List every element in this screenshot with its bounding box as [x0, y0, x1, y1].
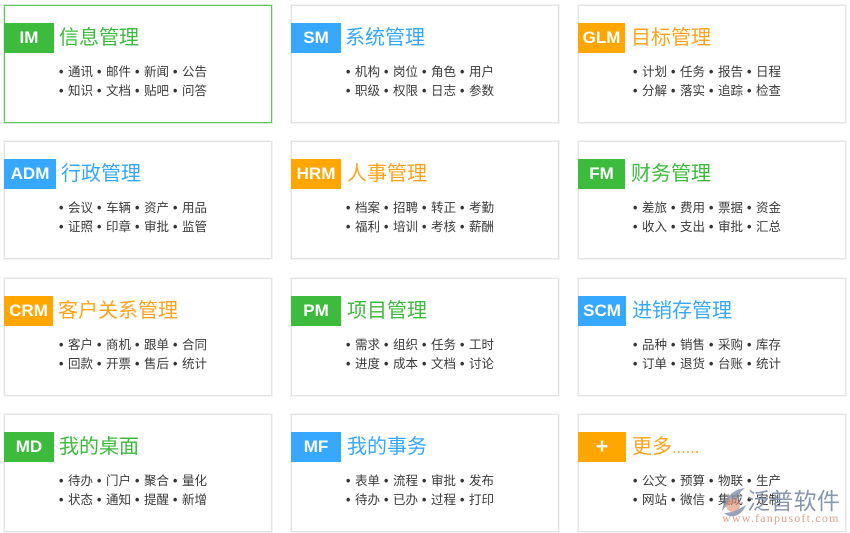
text: MD line 2: 新增	[182, 493, 207, 507]
text: CRM line 2: 售后	[144, 357, 169, 371]
text: FM line 2: 支出	[680, 220, 705, 234]
text: SCM line 1: 品种	[642, 338, 667, 352]
text: SM line 1: 机构	[355, 65, 380, 79]
badge: CRM	[4, 296, 53, 326]
text: GLM line 2: •	[709, 84, 713, 98]
badge: IM	[4, 23, 54, 53]
text: HRM line 2: •	[384, 220, 388, 234]
text: MD line 2	[59, 493, 207, 507]
text: MF line 2: 已办	[393, 493, 418, 507]
text: HRM line 2: 薪酬	[469, 220, 494, 234]
text: MF line 2: 过程	[431, 493, 456, 507]
panel: GLM	[578, 5, 846, 123]
text: CRM line 1: •	[135, 338, 139, 352]
text: SM line 1: 用户	[469, 65, 494, 79]
text: MF line 2: •	[346, 493, 350, 507]
text: MD line 2: •	[97, 493, 101, 507]
text: SM line 2: •	[346, 84, 350, 98]
text: more line 1: •	[671, 474, 675, 488]
icon: watermark logo	[722, 488, 746, 516]
heading: SCM: 进销存管理	[632, 300, 732, 322]
text: ADM line 1: •	[59, 201, 63, 215]
text: more line 2: 微信	[680, 493, 705, 507]
text: CRM line 1: 跟单	[144, 338, 169, 352]
text: watermark name: 泛普软件	[747, 488, 840, 514]
text: SCM line 1: 库存	[756, 338, 781, 352]
text: IM line 2: •	[59, 84, 63, 98]
text: HRM line 2: 培训	[393, 220, 418, 234]
text: FM line 2: 收入	[642, 220, 667, 234]
text: ADM line 2: •	[59, 220, 63, 234]
text: SCM line 2: 台账	[718, 357, 743, 371]
text: GLM line 1: •	[709, 65, 713, 79]
text: more line 1: 预算	[680, 474, 705, 488]
badge: plus: +	[596, 435, 608, 458]
heading: more: 更多......	[632, 436, 699, 458]
panel: SCM	[578, 278, 846, 396]
text: SM line 1: 角色	[431, 65, 456, 79]
text: CRM line 2: •	[97, 357, 101, 371]
badge: GLM: GLM	[583, 28, 620, 47]
text: more line 2	[633, 493, 781, 507]
text: PM line 1: 工时	[469, 338, 494, 352]
text: MF line 1: •	[384, 474, 388, 488]
text: GLM line 1: 报告	[718, 65, 743, 79]
heading: ADM: 行政管理	[61, 163, 141, 185]
badge: ADM	[4, 159, 56, 189]
text: IM line 2: 贴吧	[144, 84, 169, 98]
text: more line 1: 公文	[642, 474, 667, 488]
badge: SM: SM	[303, 28, 329, 47]
text: MF line 2	[346, 493, 494, 507]
text: MF line 1: •	[422, 474, 426, 488]
panel: more	[578, 414, 846, 532]
text: FM line 2: •	[747, 220, 751, 234]
text: MF line 2: 待办	[355, 493, 380, 507]
text: MF line 1	[346, 474, 494, 488]
text: MD line 1: 待办	[68, 474, 93, 488]
text: SM line 2: 职级	[355, 84, 380, 98]
text: CRM line 2: •	[59, 357, 63, 371]
text: SM line 1: •	[384, 65, 388, 79]
badge: HRM: HRM	[297, 164, 335, 183]
text: GLM line 1: 日程	[756, 65, 781, 79]
text: SM line 2: 日志	[431, 84, 456, 98]
text: IM line 2: 问答	[182, 84, 207, 98]
badge: SCM: SCM	[583, 301, 621, 320]
text: ADM line 2	[59, 220, 207, 234]
panel: MD	[4, 414, 272, 532]
text: CRM line 1: •	[97, 338, 101, 352]
badge: MF	[291, 432, 341, 462]
text: ADM line 1: 车辆	[106, 201, 131, 215]
text: GLM line 2: 落实	[680, 84, 705, 98]
text: IM line 1	[59, 65, 207, 79]
text: CRM line 1: 合同	[182, 338, 207, 352]
text: CRM line 1	[59, 338, 207, 352]
text: HRM line 1: 档案	[355, 201, 380, 215]
text: more line 2: 集成	[718, 493, 743, 507]
badge: MD	[4, 432, 54, 462]
text: SM line 1	[346, 65, 494, 79]
text: PM line 2: 文档	[431, 357, 456, 371]
text: more line 1: •	[709, 474, 713, 488]
text: SCM line 2	[633, 357, 781, 371]
text: more line 2: 定制	[756, 493, 781, 507]
badge: IM: IM	[20, 28, 38, 47]
text: SCM line 2: 订单	[642, 357, 667, 371]
text: MD line 2: 提醒	[144, 493, 169, 507]
text: more line 1: •	[633, 474, 637, 488]
text: FM line 2: •	[633, 220, 637, 234]
text: FM line 1: 资金	[756, 201, 781, 215]
text: MD line 1: 聚合	[144, 474, 169, 488]
badge: HRM	[291, 159, 341, 189]
text: watermark url: www.fanpusoft.com	[722, 511, 840, 525]
text: CRM line 1: •	[173, 338, 177, 352]
badge: SCM	[578, 296, 626, 326]
text: IM line 2: •	[173, 84, 177, 98]
text: GLM line 1	[633, 65, 781, 79]
text: PM line 1: 组织	[393, 338, 418, 352]
text: MD line 1: •	[173, 474, 177, 488]
text: CRM line 2: •	[135, 357, 139, 371]
heading: IM: 信息管理	[59, 27, 139, 49]
text: GLM line 2: 追踪	[718, 84, 743, 98]
text: CRM line 1: 客户	[68, 338, 93, 352]
text: SCM line 2: 统计	[756, 357, 781, 371]
text: MF line 1: 表单	[355, 474, 380, 488]
text: PM line 2: 成本	[393, 357, 418, 371]
text: HRM line 1: 招聘	[393, 201, 418, 215]
text: ADM line 1: 用品	[182, 201, 207, 215]
text: HRM line 1: •	[422, 201, 426, 215]
text: ADM line 1: •	[97, 201, 101, 215]
text: FM line 1: 费用	[680, 201, 705, 215]
text: IM line 1: 邮件	[106, 65, 131, 79]
text: MF line 1: •	[460, 474, 464, 488]
text: SM line 2: •	[460, 84, 464, 98]
text: IM line 1: •	[59, 65, 63, 79]
text: HRM line 1: 转正	[431, 201, 456, 215]
panel: SM	[291, 5, 559, 123]
text: SCM line 1: 采购	[718, 338, 743, 352]
text: GLM line 2: •	[747, 84, 751, 98]
text: PM line 1: 任务	[431, 338, 456, 352]
text: MF line 1: •	[346, 474, 350, 488]
heading: GLM: 目标管理	[631, 27, 711, 49]
text: more line 2: •	[747, 493, 751, 507]
text: GLM line 1: •	[747, 65, 751, 79]
text: HRM line 1: •	[346, 201, 350, 215]
badge: FM	[578, 159, 625, 189]
text: FM line 1	[633, 201, 781, 215]
text: MF line 2: •	[460, 493, 464, 507]
badge: CRM: CRM	[9, 301, 48, 320]
text: MD line 1: 量化	[182, 474, 207, 488]
text: ADM line 2: 证照	[68, 220, 93, 234]
text: SCM line 1: 销售	[680, 338, 705, 352]
text: CRM line 2: 统计	[182, 357, 207, 371]
text: MF line 1: 审批	[431, 474, 456, 488]
text: ADM line 2: •	[173, 220, 177, 234]
badge: plus	[578, 432, 626, 462]
text: PM line 1: •	[422, 338, 426, 352]
text: GLM line 2	[633, 84, 781, 98]
text: IM line 1: 新闻	[144, 65, 169, 79]
text: MD line 2: 状态	[68, 493, 93, 507]
text: SM line 1: •	[346, 65, 350, 79]
text: PM line 2: •	[346, 357, 350, 371]
text: HRM line 2: 福利	[355, 220, 380, 234]
text: more line 2: •	[671, 493, 675, 507]
text: IM line 2	[59, 84, 207, 98]
text: GLM line 1: •	[671, 65, 675, 79]
text: FM line 1: 票据	[718, 201, 743, 215]
badge: PM: PM	[303, 301, 329, 320]
text: GLM line 1: 计划	[642, 65, 667, 79]
text: FM line 2: 汇总	[756, 220, 781, 234]
text: more line 1	[633, 474, 781, 488]
text: PM line 1: •	[346, 338, 350, 352]
text: IM line 1: •	[173, 65, 177, 79]
text: SM line 1: •	[422, 65, 426, 79]
text: MF line 2: 打印	[469, 493, 494, 507]
text: CRM line 1: 商机	[106, 338, 131, 352]
badge: MD: MD	[16, 437, 42, 456]
text: HRM line 1: •	[384, 201, 388, 215]
text: SM line 2: 参数	[469, 84, 494, 98]
text: SCM line 1	[633, 338, 781, 352]
text: HRM line 2: •	[346, 220, 350, 234]
text: IM line 1: •	[135, 65, 139, 79]
text: SCM line 1: •	[633, 338, 637, 352]
text: SM line 2: 权限	[393, 84, 418, 98]
panel: IM	[4, 5, 272, 123]
text: SCM line 2: 退货	[680, 357, 705, 371]
text: PM line 1	[346, 338, 494, 352]
panel: HRM	[291, 141, 559, 259]
text: CRM line 2: •	[173, 357, 177, 371]
text: FM line 2: •	[709, 220, 713, 234]
text: SM line 2	[346, 84, 494, 98]
text: PM line 2: •	[384, 357, 388, 371]
text: FM line 1: •	[709, 201, 713, 215]
text: SM line 2: •	[384, 84, 388, 98]
text: ADM line 2: •	[97, 220, 101, 234]
text: PM line 2: •	[460, 357, 464, 371]
text: GLM line 1: 任务	[680, 65, 705, 79]
text: ADM line 2: 审批	[144, 220, 169, 234]
text: ADM line 1	[59, 201, 207, 215]
badge: SM	[291, 23, 341, 53]
text: SCM line 2: •	[709, 357, 713, 371]
text: MF line 1: 发布	[469, 474, 494, 488]
text: FM line 2: 审批	[718, 220, 743, 234]
text: CRM line 2	[59, 357, 207, 371]
text: ADM line 1: •	[135, 201, 139, 215]
text: PM line 1: 需求	[355, 338, 380, 352]
text: MD line 2: •	[135, 493, 139, 507]
text: SCM line 1: •	[671, 338, 675, 352]
text: more line 1: 物联	[718, 474, 743, 488]
text: SCM line 2: •	[747, 357, 751, 371]
text: PM line 2: 讨论	[469, 357, 494, 371]
panel: MF	[291, 414, 559, 532]
badge: ADM: ADM	[11, 164, 49, 183]
heading: HRM: 人事管理	[347, 163, 427, 185]
panel: ADM	[4, 141, 272, 259]
text: SCM line 2: •	[671, 357, 675, 371]
heading: PM: 项目管理	[347, 300, 427, 322]
badge: GLM	[578, 23, 625, 53]
text: FM line 2: •	[671, 220, 675, 234]
text: ADM line 2: •	[135, 220, 139, 234]
panel: CRM	[4, 278, 272, 396]
heading: CRM: 客户关系管理	[58, 300, 178, 322]
text: CRM line 2: 回款	[68, 357, 93, 371]
heading: SM: 系统管理	[345, 27, 425, 49]
heading: MF: 我的事务	[347, 436, 427, 458]
text: SCM line 1: •	[709, 338, 713, 352]
text: FM line 1: 差旅	[642, 201, 667, 215]
text: MD line 2: •	[173, 493, 177, 507]
text: GLM line 2: 分解	[642, 84, 667, 98]
text: ADM line 2: 监管	[182, 220, 207, 234]
text: GLM line 2: 检查	[756, 84, 781, 98]
text: HRM line 1: •	[460, 201, 464, 215]
text: GLM line 2: •	[633, 84, 637, 98]
text: IM line 1: 通讯	[68, 65, 93, 79]
text: more line 1: 生产	[756, 474, 781, 488]
text: MD line 1: •	[59, 474, 63, 488]
text: MF line 2: •	[384, 493, 388, 507]
text: SM line 2: •	[422, 84, 426, 98]
text: SM line 1: •	[460, 65, 464, 79]
text: PM line 2	[346, 357, 494, 371]
text: FM line 2	[633, 220, 781, 234]
text: IM line 1: •	[97, 65, 101, 79]
text: more line 2: •	[633, 493, 637, 507]
text: IM line 2: •	[135, 84, 139, 98]
text: SM line 1: 岗位	[393, 65, 418, 79]
text: more line 2: •	[709, 493, 713, 507]
text: MD line 2: •	[59, 493, 63, 507]
text: CRM line 2: 开票	[106, 357, 131, 371]
text: SCM line 2: •	[633, 357, 637, 371]
text: MD line 1: •	[97, 474, 101, 488]
badge: FM: FM	[589, 164, 614, 183]
badge: PM	[291, 296, 341, 326]
text: IM line 2: •	[97, 84, 101, 98]
text: HRM line 1: 考勤	[469, 201, 494, 215]
text: MF line 1: 流程	[393, 474, 418, 488]
text: IM line 2: 文档	[106, 84, 131, 98]
text: MD line 2: 通知	[106, 493, 131, 507]
text: GLM line 1: •	[633, 65, 637, 79]
text: MD line 1: •	[135, 474, 139, 488]
text: more line 1: •	[747, 474, 751, 488]
text: PM line 2: 进度	[355, 357, 380, 371]
text: ADM line 1: •	[173, 201, 177, 215]
text: CRM line 1: •	[59, 338, 63, 352]
badge: MF: MF	[304, 437, 328, 456]
panel: FM	[578, 141, 846, 259]
text: FM line 1: •	[747, 201, 751, 215]
heading: FM: 财务管理	[631, 163, 711, 185]
text: HRM line 1	[346, 201, 494, 215]
text: SCM line 1: •	[747, 338, 751, 352]
text: PM line 2: •	[422, 357, 426, 371]
text: ADM line 1: 会议	[68, 201, 93, 215]
text: PM line 1: •	[384, 338, 388, 352]
text: GLM line 2: •	[671, 84, 675, 98]
text: HRM line 2: •	[460, 220, 464, 234]
heading: MD: 我的桌面	[59, 436, 139, 458]
text: ADM line 1: 资产	[144, 201, 169, 215]
text: IM line 2: 知识	[68, 84, 93, 98]
text: MF line 2: •	[422, 493, 426, 507]
text: IM line 1: 公告	[182, 65, 207, 79]
text: MD line 1	[59, 474, 207, 488]
panel: PM	[291, 278, 559, 396]
text: FM line 1: •	[633, 201, 637, 215]
text: more line 2: 网站	[642, 493, 667, 507]
text: PM line 1: •	[460, 338, 464, 352]
text: ADM line 2: 印章	[106, 220, 131, 234]
text: FM line 1: •	[671, 201, 675, 215]
text: MD line 1: 门户	[106, 474, 131, 488]
text: HRM line 2: •	[422, 220, 426, 234]
text: HRM line 2: 考核	[431, 220, 456, 234]
text: HRM line 2	[346, 220, 494, 234]
